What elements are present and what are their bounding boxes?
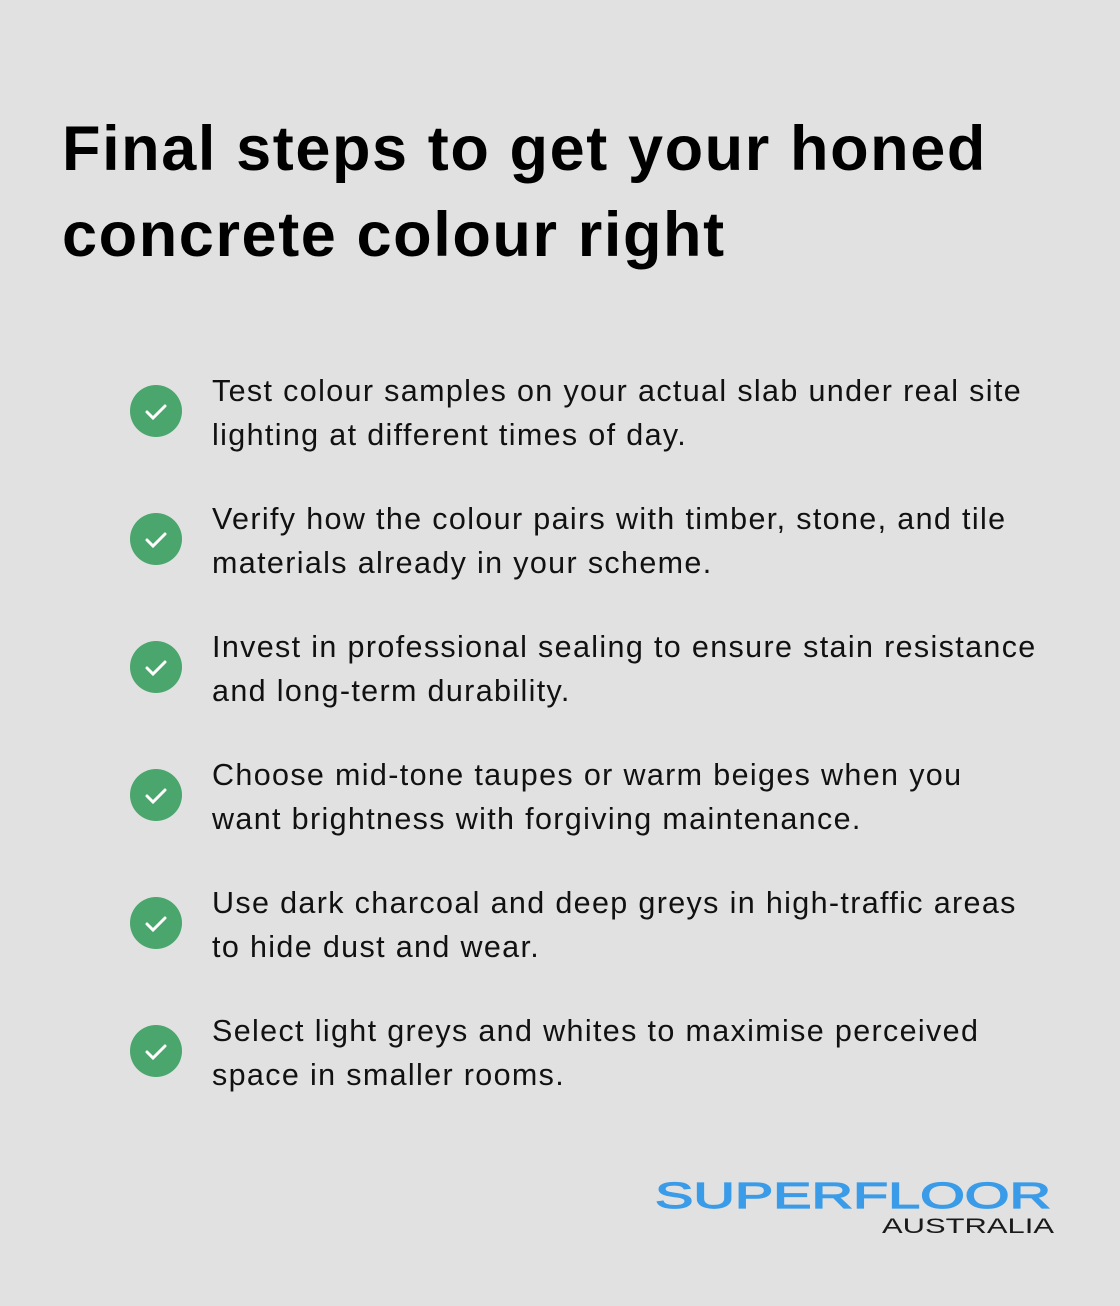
icon: check	[130, 1025, 182, 1077]
item 2	[130, 502, 1006, 580]
text: Select light greys and whites to maximise perceived	[212, 1014, 979, 1048]
title	[62, 114, 987, 270]
icon: check	[130, 385, 182, 437]
item 1	[130, 374, 1022, 452]
text: Use dark charcoal and deep greys in high-traffic areas	[212, 886, 1017, 920]
text: space in smaller rooms.	[212, 1058, 565, 1092]
logo: SUPERFLOOR	[655, 1176, 1051, 1216]
text: to hide dust and wear.	[212, 930, 540, 964]
text	[212, 630, 1037, 708]
icon: check	[130, 641, 182, 693]
text	[212, 1014, 979, 1092]
title: Final steps to get your honed	[62, 114, 987, 184]
item 5	[130, 886, 1017, 964]
text: and long-term durability.	[212, 674, 571, 708]
logo: AUSTRALIA	[882, 1215, 1054, 1238]
icon: check	[130, 513, 182, 565]
text	[212, 502, 1006, 580]
text: Choose mid-tone taupes or warm beiges when you	[212, 758, 962, 792]
icon: check	[130, 769, 182, 821]
text	[212, 374, 1022, 452]
text: Invest in professional sealing to ensure stain resistance	[212, 630, 1037, 664]
logo	[655, 1176, 1054, 1238]
title: concrete colour right	[62, 200, 726, 270]
item 3	[130, 630, 1037, 708]
text: want brightness with forgiving maintenance.	[212, 802, 862, 836]
icon: check	[130, 897, 182, 949]
item 4	[130, 758, 962, 836]
item 6	[130, 1014, 979, 1092]
text: materials already in your scheme.	[212, 546, 713, 580]
text	[212, 758, 962, 836]
text	[212, 886, 1017, 964]
text: Verify how the colour pairs with timber, stone, and tile	[212, 502, 1006, 536]
text: lighting at different times of day.	[212, 418, 687, 452]
text: Test colour samples on your actual slab under real site	[212, 374, 1022, 408]
